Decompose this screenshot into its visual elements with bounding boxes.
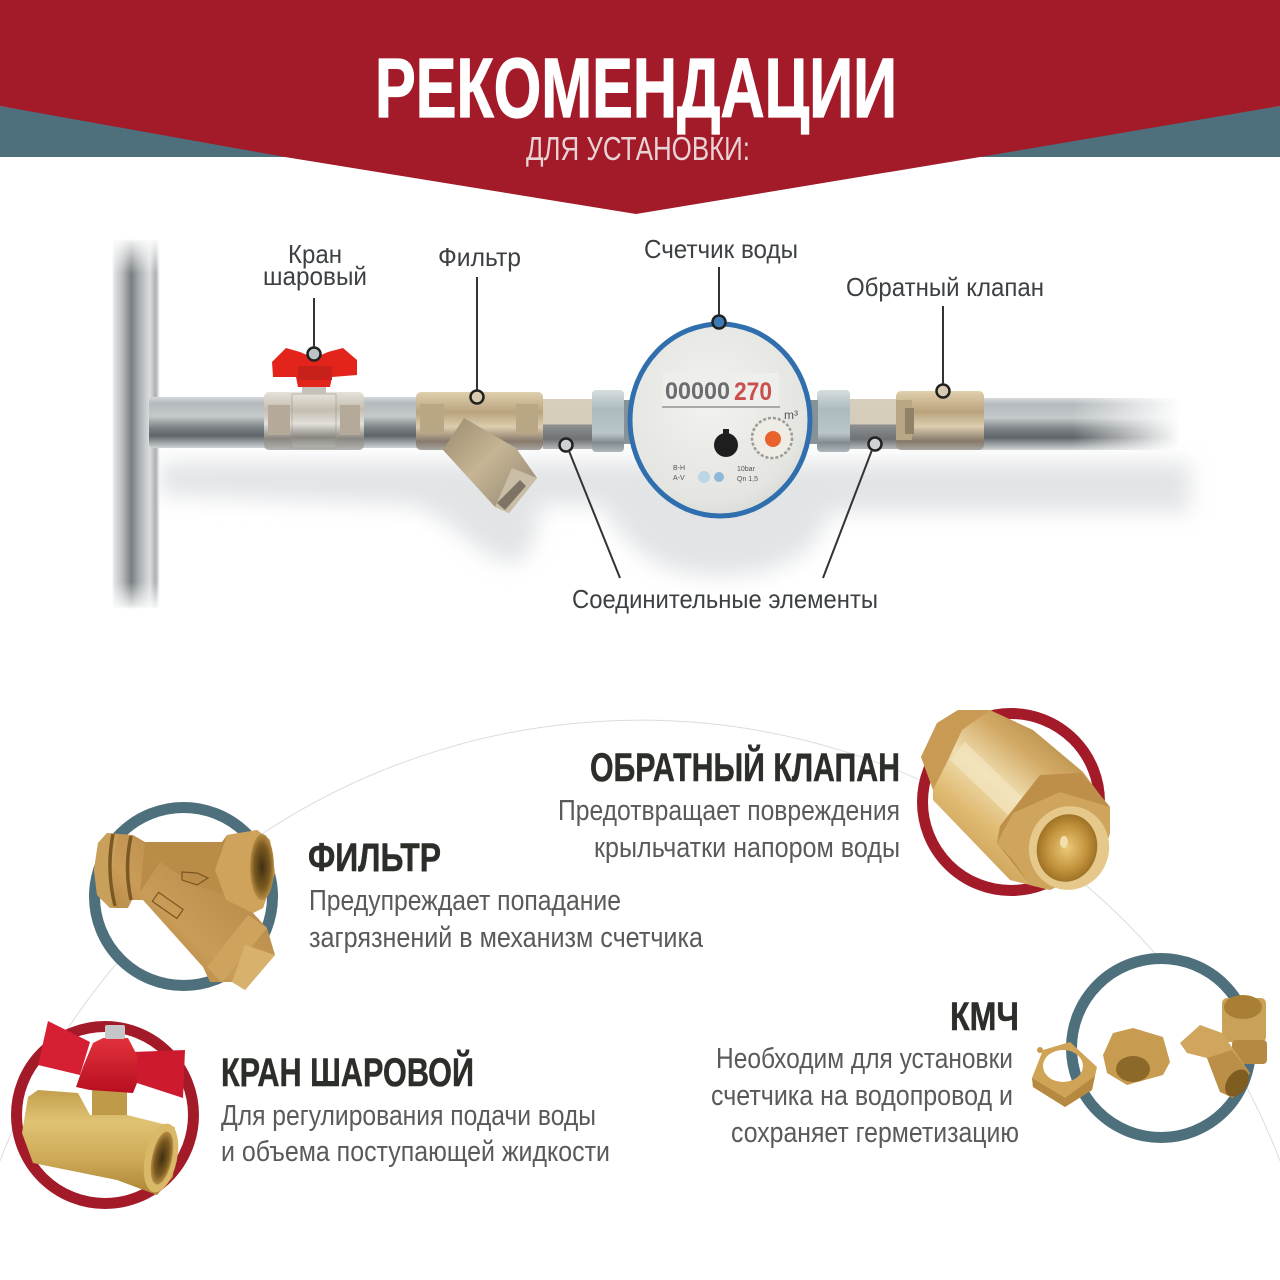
label: ball valve [263, 239, 367, 291]
ball valve [264, 348, 364, 450]
diagram: water meter installation [108, 234, 1190, 614]
cast shadow on wall [160, 462, 1190, 576]
panel: ball valve [16, 1021, 610, 1204]
callout marker [936, 384, 950, 398]
description [558, 795, 900, 864]
description: Предупреждает попадание [309, 885, 621, 917]
horizontal pipe [149, 397, 1181, 450]
filter on pipe [416, 390, 543, 513]
label: water meter: Счетчик воды [644, 234, 798, 264]
water meter: 270 [734, 378, 772, 406]
leader lines [314, 267, 943, 578]
vertical riser pipe [108, 236, 164, 612]
water meter: B-H [673, 465, 685, 472]
description: загрязнений в механизм счетчика [309, 922, 704, 954]
description [221, 1100, 610, 1168]
description: Для регулирования подачи воды [221, 1100, 596, 1132]
label: check valve: Обратный клапан [846, 272, 1044, 302]
label: filter: Фильтр [438, 242, 521, 272]
heading: КРАН ШАРОВОЙ [221, 1049, 474, 1095]
description [309, 885, 704, 954]
callout marker [560, 438, 572, 452]
small dial [752, 418, 792, 458]
water meter: 10bar [737, 466, 756, 473]
label: connecting elements: Соединительные элементы [572, 584, 878, 614]
icon: check valve [921, 710, 1119, 899]
panel: filter [94, 808, 704, 990]
description: и объема поступающей жидкости [221, 1136, 610, 1168]
water meter [630, 316, 810, 516]
icon: fittings set [1032, 995, 1267, 1107]
heading: ОБРАТНЫЙ КЛАПАН [590, 744, 900, 790]
control knob [714, 429, 738, 457]
title: РЕКОМЕНДАЦИИ [375, 41, 897, 135]
callout marker [308, 348, 320, 360]
icon: ball valve [22, 1021, 185, 1196]
description [711, 1043, 1019, 1149]
panel: check valve [558, 710, 1119, 899]
water meter: Qn 1,5 [737, 476, 758, 483]
callout marker [470, 390, 484, 404]
heading: ФИЛЬТР [308, 836, 441, 880]
callout marker [868, 438, 882, 450]
description: крыльчатки напором воды [594, 832, 900, 864]
water meter: A-V [673, 475, 685, 482]
panel: fittings [711, 958, 1267, 1149]
ring [1072, 958, 1250, 1138]
description: Предотвращает повреждения [558, 795, 900, 827]
ring [922, 714, 1100, 890]
connecting arc [0, 720, 1280, 1161]
callout marker [712, 316, 726, 328]
ring [94, 808, 272, 986]
water meter: m³ [784, 408, 798, 422]
description: счетчика на водопровод и [711, 1080, 1013, 1112]
heading: КМЧ [950, 995, 1019, 1039]
connecting fittings [543, 390, 898, 452]
icon: Y-strainer [94, 830, 275, 990]
header banner [0, 0, 1280, 214]
odometer digits: 00000 [665, 378, 730, 405]
label: ball valve: шаровый [263, 261, 367, 291]
description: Необходим для установки [716, 1043, 1013, 1075]
check valve on pipe [896, 384, 984, 450]
ring [16, 1026, 194, 1204]
subtitle: ДЛЯ УСТАНОВКИ: [526, 130, 750, 167]
label: ball valve: Кран [288, 239, 342, 269]
description: сохраняет герметизацию [731, 1117, 1019, 1149]
